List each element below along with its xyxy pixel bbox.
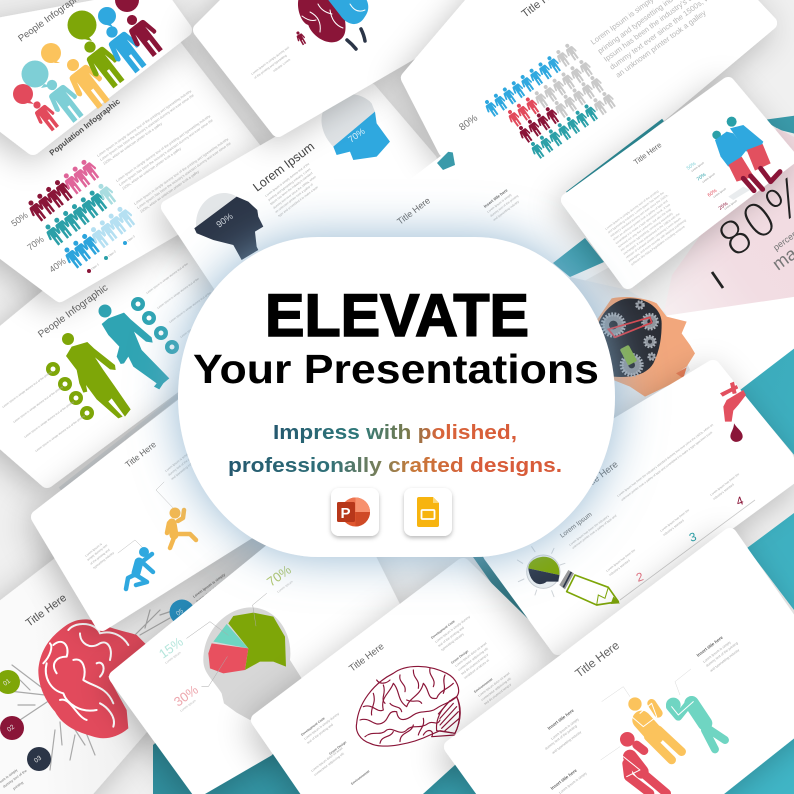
caption: left top: and typesetting industry — [551, 730, 582, 755]
paragraph: passages, and more recently with desktop publishing — [628, 218, 687, 263]
paragraphs — [96, 89, 232, 214]
paragraph: Lorem Ipsum is simply dummy text of the printing — [604, 189, 660, 231]
paragraph: scrambled it to make a type specimen book. It has — [615, 202, 671, 245]
number captions: industry's standard — [608, 558, 631, 577]
dark block — [640, 400, 658, 412]
list text lower left: text of the printing and — [306, 722, 334, 745]
caption: Lorem Ipsum is simply dummy text — [250, 45, 290, 76]
caption: dummy text of the printing — [489, 194, 519, 218]
figures: couple — [712, 117, 780, 200]
heading caption: Lorem Ipsum has been the industry's — [568, 514, 610, 547]
figure: head with gears — [590, 297, 695, 397]
captions: Lorem Ipsum — [276, 579, 294, 594]
stats: 25% — [718, 201, 730, 212]
paragraph: dummy text ever since the 1500s, when — [272, 175, 317, 210]
pictogram row 3 — [516, 74, 606, 144]
slide: head percent — [168, 90, 430, 300]
text: right captions: Lorem Ipsum is simply dummy text of the — [145, 261, 189, 295]
figure: green body — [66, 342, 131, 418]
teal right — [740, 344, 794, 462]
caption lower: Lorem Ipsum is — [84, 542, 103, 558]
caption 05: printing — [198, 598, 210, 608]
teal strip above blob — [553, 238, 604, 277]
white slide below pink — [650, 296, 794, 430]
caption: right: dummy text of the printing — [705, 641, 739, 668]
head: blue 70 — [321, 94, 390, 160]
list text: typesetting industry — [440, 632, 465, 652]
caption: right — [696, 635, 740, 673]
brain maroon half — [298, 0, 346, 42]
label: 80%: 80% — [457, 113, 480, 133]
paragraph: when an unknown printer took a galley of type and — [612, 199, 669, 241]
caption lower — [84, 542, 115, 570]
labels: percentages — [9, 210, 68, 275]
text: right captions — [145, 261, 212, 339]
slide: outlined brain — [258, 565, 560, 794]
number captions: Lorem Ipsum has been the — [659, 508, 690, 533]
tagline line 2: professionally crafted designs. — [228, 455, 562, 477]
slide: three figures — [451, 535, 794, 794]
labels: percentages: 50% — [9, 210, 30, 229]
list text: Lorem Ipsum is simply dummy — [434, 614, 471, 644]
caption: left top: Insert title here — [547, 708, 575, 731]
list text lower left: Green Design — [328, 740, 347, 756]
caption lower: of the printing and — [89, 548, 111, 566]
caption: right: Insert title here — [696, 635, 724, 658]
title: Title Here — [123, 439, 158, 470]
paragraph: and typesetting industry. Lorem Ipsum has been the — [607, 190, 665, 234]
stat captions — [690, 161, 738, 211]
text: right captions: Lorem Ipsum is simply dummy text of the — [156, 276, 200, 310]
text: right captions: Lorem Ipsum is simply dummy text of the — [168, 290, 212, 324]
paragraph: Lorem Ipsum is simply dummy text of the — [264, 162, 310, 198]
labels: percentages: 70% — [25, 234, 46, 253]
stat captions: Lorem Ipsum — [701, 172, 716, 184]
caption: of the printing and typesetting — [253, 53, 288, 80]
pictogram row 3 — [60, 203, 138, 271]
paragraphs: Lorem Ipsum is simply dummy text of the printing and typesetting industry. — [115, 114, 212, 183]
brain folds — [302, 4, 365, 32]
list text: sed do eiusmod tempor — [483, 682, 513, 706]
brain legs — [347, 29, 365, 49]
paragraph: an unknown printer took a galley — [614, 8, 708, 80]
icon glyphs — [50, 302, 174, 416]
text: right captions: Lorem Ipsum is simply — [179, 319, 205, 339]
badges: 02 — [6, 723, 16, 734]
icon: google slides — [404, 488, 452, 536]
label: 90%: 90% — [214, 211, 235, 230]
icons: teal circles — [131, 297, 179, 354]
paragraphs: 1500s, when an unknown printer took a galley — [121, 147, 182, 191]
text: left captions: Lorem Ipsum is simply dummy text of the printing — [12, 385, 64, 424]
legend: User 3 — [126, 234, 136, 243]
captions: Lorem Ipsum — [164, 650, 182, 665]
caption upper: and typesetting industry — [170, 458, 198, 481]
divider line — [620, 500, 755, 600]
paragraph — [264, 162, 319, 218]
figure: yellow runner — [167, 508, 196, 548]
number captions: Lorem Ipsum has been the — [709, 472, 740, 497]
text: left captions: Lorem Ipsum is simply dummy text of the printing — [1, 370, 53, 409]
figure: teal doctor — [102, 313, 169, 389]
numbers: 3 — [687, 529, 699, 545]
paragraph: release of Letraset sheets containing Lorem Ipsum — [625, 216, 682, 259]
slide: gears background — [560, 277, 690, 430]
slide: 80 percent pictogram — [408, 0, 770, 193]
long text: Lorem Ipsum has been the industry's standard dummy text ever since the 1500s, when an — [616, 423, 714, 498]
figure: yellow — [628, 697, 682, 760]
figure: red — [620, 732, 667, 793]
paragraph — [604, 186, 690, 266]
paragraph: type and scrambled it to make a type — [277, 185, 319, 218]
tree branches — [0, 610, 175, 770]
stats: 70% — [696, 172, 708, 183]
teal strip between slides — [473, 553, 558, 662]
paragraphs: Lorem Ipsum is simply dummy text of the printing and typesetting industry. — [133, 137, 230, 206]
list text lower left: Lorem Ipsum is simply dummy — [303, 711, 340, 741]
numbers: 4 — [734, 493, 746, 509]
list text: text of the printing and — [437, 625, 465, 648]
badges: 03 — [33, 754, 43, 765]
list text lower left — [300, 711, 370, 786]
badge 05 — [170, 600, 194, 624]
slide: people infographic speech bubbles — [0, 0, 185, 148]
paragraph: printing and typesetting industry. Lorem — [267, 167, 312, 202]
heading: your presentations: Your Presentations — [193, 346, 599, 392]
pictogram row 4 — [528, 90, 618, 160]
caption: Lorem Ipsum is simply — [486, 192, 513, 214]
slide: population infographic — [0, 40, 272, 295]
caption 05: dummy text of the — [195, 584, 221, 604]
title: population infographic: Population Infographic — [48, 97, 122, 158]
small person — [294, 30, 308, 46]
bar — [712, 272, 723, 288]
list text: sed do eiusmod tempor — [460, 652, 490, 676]
connector upper — [156, 482, 175, 510]
icon: powerpoint — [331, 488, 379, 536]
paragraphs: 1500s, when an unknown printer took a galley — [139, 170, 200, 214]
captions: Lorem Ipsum — [179, 698, 197, 713]
text: left captions: Lorem Ipsum is simply dummy text of the printing — [23, 400, 75, 439]
text: left captions — [1, 370, 86, 453]
captions — [164, 579, 294, 713]
brain blue half — [328, 0, 368, 24]
list text lower left: Lorem Ipsum dolor sit amet — [310, 746, 344, 773]
label 15%: 15% — [156, 634, 186, 661]
caption 05: Lorem Ipsum is simply — [192, 573, 226, 599]
diagram: head and pie — [187, 593, 302, 720]
stat captions: Lorem Ipsum — [690, 161, 705, 173]
slide: couple — [567, 84, 790, 282]
pictogram row 1 — [24, 156, 102, 224]
title: Title Here — [395, 195, 432, 227]
list text: Green Design — [450, 649, 469, 665]
list text: Development Code — [430, 619, 456, 640]
badge 05 label: 05 — [175, 607, 185, 618]
heading caption: unknown printer took a galley of type and — [571, 513, 618, 550]
caption: left bottom — [550, 768, 588, 794]
heading: lorem ipsum: Lorem Ipsum — [250, 139, 317, 194]
stat captions: Lorem Ipsum — [712, 187, 727, 199]
label: 70%: 70% — [346, 126, 367, 145]
list text: incididunt ut labore et — [463, 658, 490, 680]
heading: elevate: ELEVATE — [265, 282, 529, 349]
accent line — [567, 120, 663, 193]
tagline line 1: Impress with polished, — [273, 422, 517, 444]
head: dark 90 — [194, 193, 263, 260]
paragraph: Ipsum has been the industry's standard — [269, 171, 314, 206]
slide: lightbulb pencil faucet — [490, 367, 794, 648]
caption lower: typesetting industry — [92, 550, 115, 570]
teal block — [437, 148, 455, 170]
title: Title Here — [24, 592, 69, 629]
title: people infographic: People Infographic — [36, 283, 110, 340]
title: Title Here — [632, 140, 663, 167]
numbers — [634, 493, 746, 585]
caption lower: simply dummy text — [86, 543, 108, 562]
caption: left top: dummy text of the printing — [544, 724, 578, 751]
list text lower left: consectetur adipiscing elit — [313, 752, 345, 777]
brain — [38, 619, 148, 738]
title: Title Here — [347, 641, 386, 674]
caption: left bottom: Insert title here — [550, 768, 578, 791]
number captions — [605, 472, 740, 577]
pictogram row 2 — [505, 58, 595, 128]
caption: and typesetting industry — [492, 199, 520, 222]
badges — [0, 670, 51, 771]
teal backdrop top right — [763, 115, 794, 135]
list text: consectetur adipiscing elit — [480, 677, 512, 702]
slide: title here figures — [38, 380, 300, 624]
caption: industry. Lorem — [272, 57, 292, 73]
slide: pink beam 80 percent — [663, 128, 794, 316]
teal backdrop lower right — [713, 730, 794, 794]
legend — [87, 234, 136, 273]
slide: title here blue — [345, 148, 604, 320]
speech bubbles — [13, 0, 139, 104]
brain outline — [356, 666, 460, 746]
paragraphs: Lorem Ipsum has been the industry's standard dummy text ever since the — [99, 93, 195, 162]
paragraphs: Lorem Ipsum is simply dummy text of the printing and typesetting industry. — [96, 89, 193, 158]
paragraphs: Lorem Ipsum has been the industry's standard dummy text ever since the — [118, 118, 214, 187]
connector lower — [118, 540, 145, 553]
shadow of pictogram slide — [408, 0, 770, 193]
caption upper: dummy text of the printing — [167, 452, 197, 477]
icon: powerpoint: P — [340, 505, 351, 522]
teal backdrop lower left — [153, 570, 480, 794]
slide: people infographic lower — [0, 170, 270, 489]
list text: Lorem Ipsum dolor sit amet — [477, 671, 511, 698]
list text: Environmental — [473, 677, 493, 694]
number captions: Lorem Ipsum has been the — [605, 548, 636, 573]
legend: User 1 — [90, 262, 100, 271]
caption: right: Lorem Ipsum is simply — [702, 640, 732, 664]
caption: left top — [544, 708, 582, 755]
figure: green head — [62, 333, 74, 345]
figure: blue crouching — [126, 547, 153, 589]
pictogram row 1 — [482, 41, 581, 118]
connectors — [601, 669, 691, 760]
stats: 60% — [707, 188, 719, 199]
title: Title Here — [572, 638, 622, 680]
badges: 01 — [2, 677, 12, 688]
center badge — [178, 237, 615, 557]
figure: mint — [666, 698, 725, 749]
icon: faucet — [720, 382, 746, 442]
numbers: 2 — [634, 569, 646, 585]
paragraph: an unknown printer took a galley of — [274, 183, 314, 214]
paragraphs: 1500s, when an unknown printer took a galley — [102, 122, 163, 166]
long text: unknown printer took a galley of type and scrambled it to make a type specimen book — [620, 430, 713, 502]
teal backdrop right — [747, 513, 794, 610]
labels: percentages: 40% — [47, 256, 68, 275]
paragraph: survived not only five centuries, but also the leap — [617, 207, 672, 249]
text: left captions: Lorem Ipsum is simply dummy text of the printing — [34, 414, 86, 453]
paragraph: software like Aldus PageMaker including versions — [630, 224, 686, 266]
label 70%: 70% — [264, 562, 294, 589]
figure: teal head — [98, 304, 112, 318]
number captions: industry's standard — [662, 518, 685, 537]
insert title: Insert title here — [483, 187, 509, 209]
paragraphs: Lorem Ipsum has been the industry's standard dummy text ever since the — [136, 141, 232, 210]
list text: Lorem Ipsum dolor sit amet — [454, 641, 488, 668]
figures — [620, 697, 725, 793]
paragraph: into electronic typesetting, remaining essentially — [620, 211, 674, 252]
slide: pie in head — [116, 535, 395, 790]
list text — [430, 614, 513, 706]
list text lower left: Development Code — [300, 716, 326, 737]
label 30%: 30% — [171, 682, 201, 709]
slide: brain top — [200, 0, 520, 130]
stats: 50% — [686, 161, 698, 172]
caption: left top: Lorem Ipsum is simply — [550, 717, 580, 741]
edge band — [60, 396, 178, 489]
icon: lightbulb pencil — [517, 547, 620, 605]
stats — [686, 161, 730, 212]
caption upper: Lorem Ipsum is simply — [164, 451, 191, 473]
pictogram row 2 — [41, 180, 119, 248]
list text: consectetur adipiscing elit — [457, 647, 489, 672]
slide: red brain — [0, 520, 320, 794]
list text lower left: Environmental — [350, 769, 370, 786]
words — [769, 227, 794, 274]
people — [27, 8, 168, 134]
paragraph: unchanged. It was popularised in the 1960s with the — [622, 212, 681, 256]
title: Title Here — [581, 459, 620, 492]
paragraph: industry's standard dummy text ever since the 1500s, — [609, 193, 669, 238]
icons: green circles — [46, 362, 94, 420]
caption 03: dummy text of the — [2, 769, 28, 789]
caption 03: printing — [12, 781, 24, 791]
number captions: industry's standard — [712, 482, 735, 501]
caption: right: and typesetting industry — [709, 648, 740, 673]
legend: User 2 — [107, 249, 117, 258]
stat captions: Lorem Ipsum — [723, 199, 738, 211]
heading: Lorem Ipsum — [559, 511, 594, 540]
